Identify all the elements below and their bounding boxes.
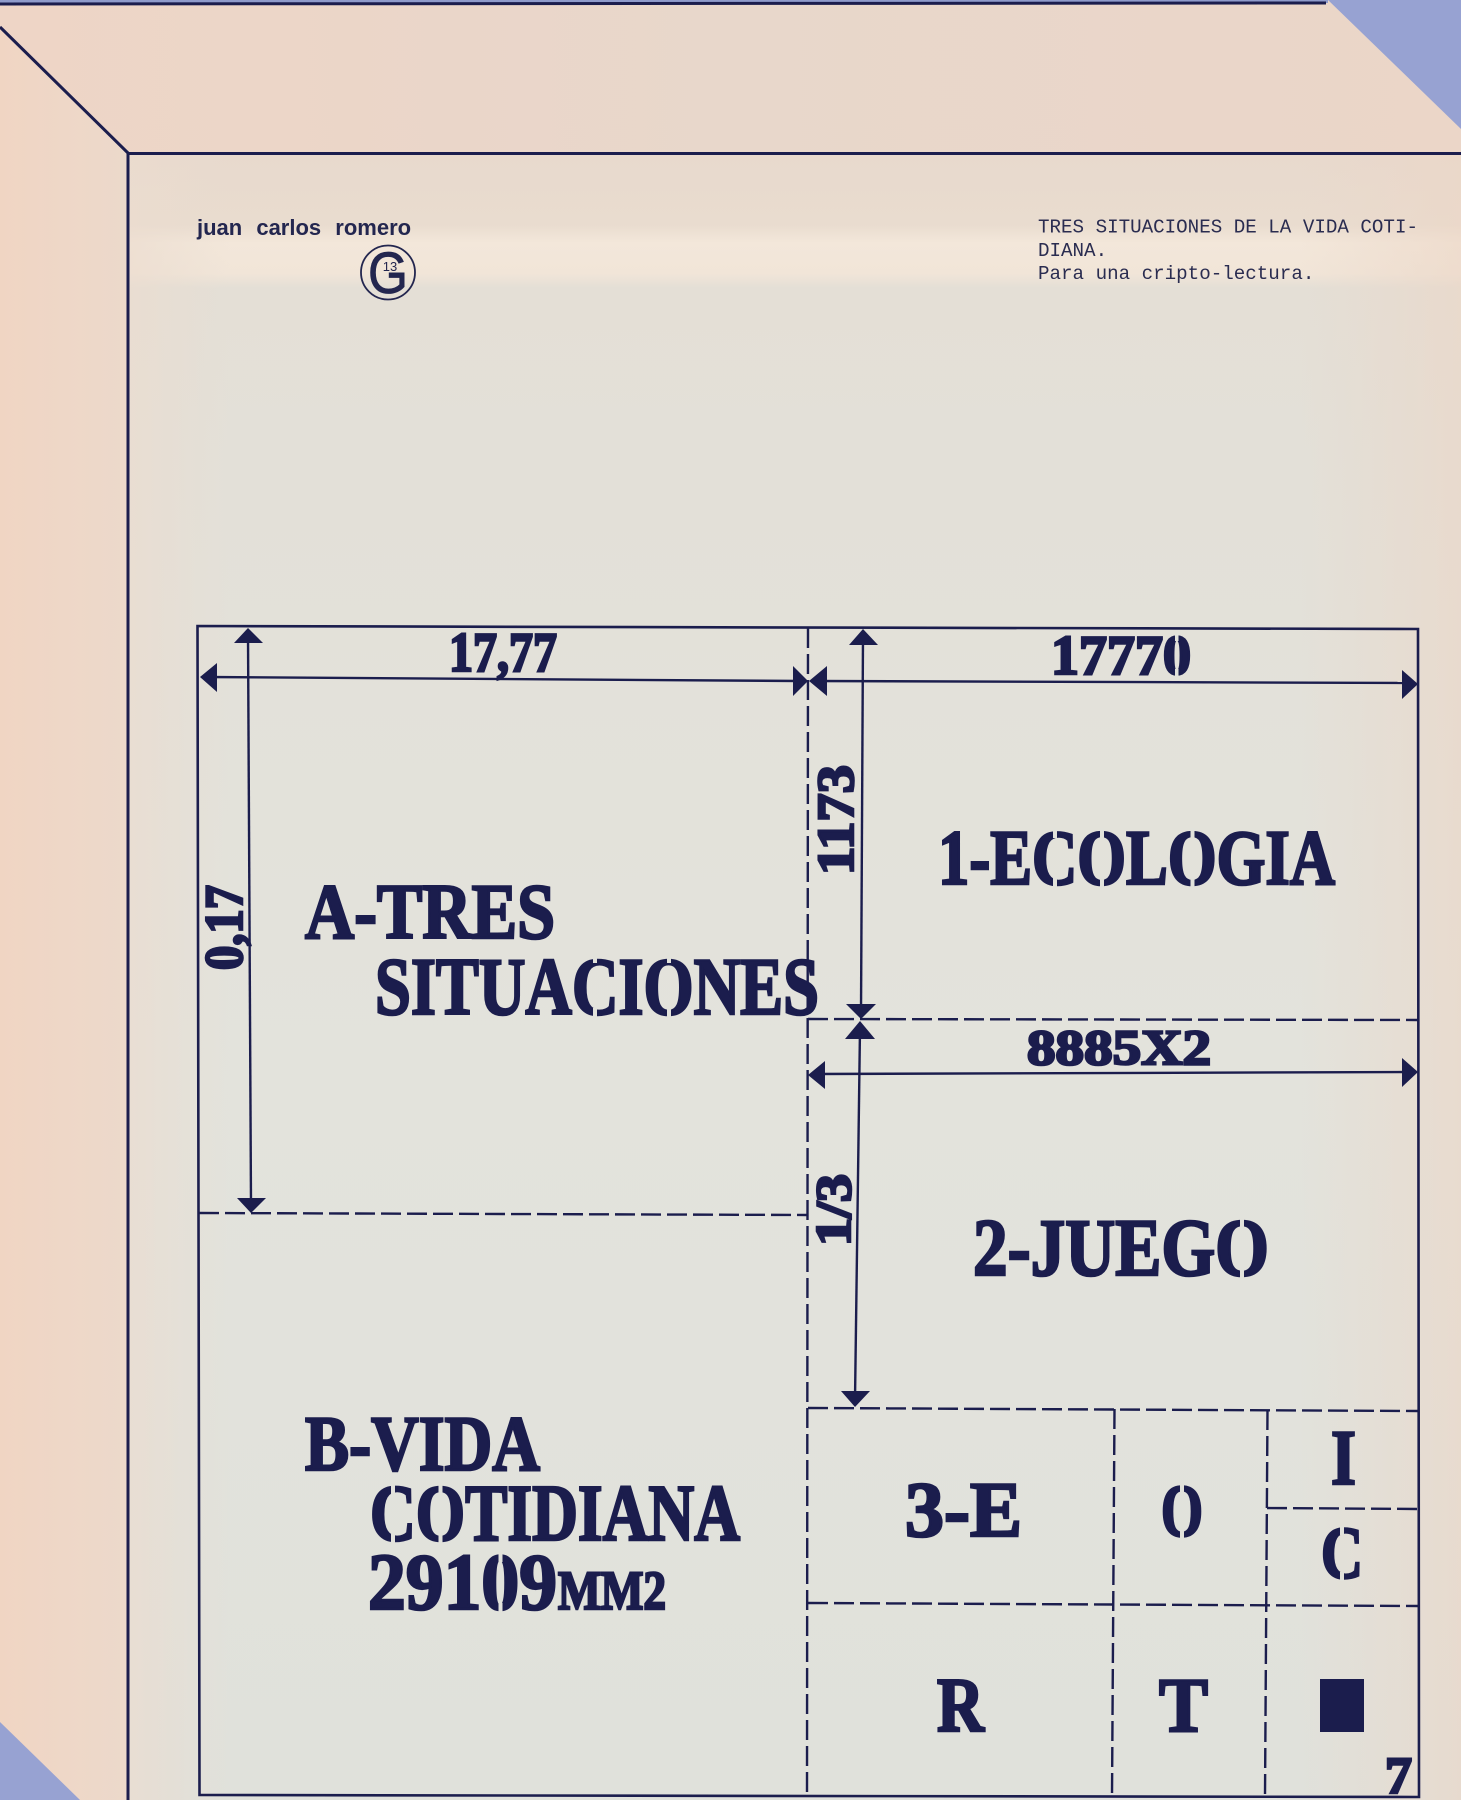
panel A heading: SITUACIONES: [375, 941, 819, 1032]
panel B heading: MM2: [558, 1560, 666, 1621]
arrow: 17770 width: [809, 666, 1418, 699]
cell: T: T: [1159, 1662, 1208, 1748]
dimension: 0,17: 0,17: [194, 885, 254, 970]
cell: O: O: [1161, 1471, 1203, 1553]
dimension: 17770: 17770: [1051, 625, 1191, 687]
panel 2 heading: 2-JUEGO: [973, 1202, 1269, 1293]
panel A heading: A-TRES: [305, 868, 555, 955]
dashed division lines: [199, 628, 1418, 1796]
panel B heading: 29109: [368, 1539, 557, 1627]
blue corner: bottom left: [0, 1722, 80, 1800]
cell: black square: [1320, 1679, 1364, 1732]
cell: C: C: [1321, 1513, 1363, 1595]
dimension: 1/3: 1/3: [805, 1174, 861, 1246]
arrow: 8885X2 width: [808, 1058, 1418, 1089]
icon: G13 logo: 13: [383, 259, 397, 274]
blue corner: top right: [1328, 0, 1461, 129]
arrow: 0,17 height: [234, 628, 266, 1213]
arrow: 17,77 width: [200, 663, 808, 696]
dimension: 1173: 1173: [808, 765, 865, 875]
description text: DIANA.: [1038, 240, 1107, 262]
author name: juan carlos romero: [196, 215, 411, 240]
description text: TRES SITUACIONES DE LA VIDA COTI-: [1038, 216, 1418, 238]
cell: I: I: [1331, 1414, 1356, 1501]
cell: R: R: [937, 1662, 985, 1748]
cell: 3-E: 3-E: [905, 1466, 1022, 1553]
panel B heading: [305, 1400, 740, 1627]
panel B heading: COTIDIANA: [370, 1470, 740, 1558]
description text: [1038, 216, 1418, 285]
panel A heading: [305, 868, 819, 1032]
panel 1 heading: 1-ECOLOGIA: [938, 814, 1335, 901]
outer plan box: [198, 626, 1419, 1797]
icon: G13 logo: G: [368, 241, 408, 306]
panel B heading: B-VIDA: [305, 1400, 540, 1487]
arrow: 1173 height: [846, 629, 878, 1019]
dimension: 17,77: 17,77: [449, 622, 557, 684]
arrow: 1/3 height: [841, 1021, 875, 1407]
dimension: 8885X2: 8885X2: [1027, 1019, 1211, 1075]
blue strip: top edge: [0, 0, 1328, 4]
description text: Para una cripto-lectura.: [1038, 263, 1314, 285]
